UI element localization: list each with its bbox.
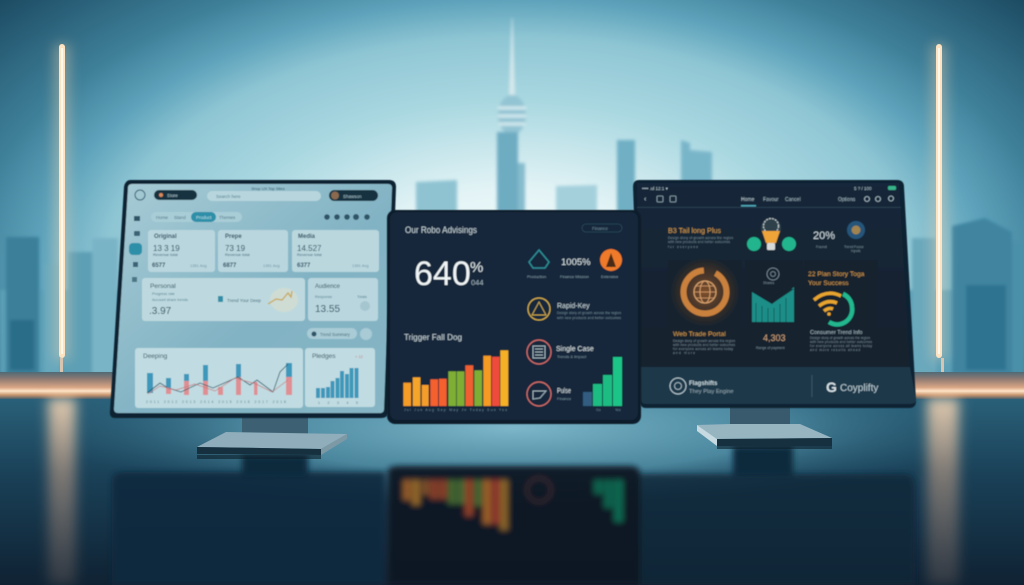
- right monitor: [633, 180, 916, 408]
- big stat: 640: [414, 255, 471, 293]
- panel: plan story: Consumer Trend Info: [810, 330, 863, 336]
- tabs: [151, 212, 242, 222]
- bar chart card: Pledges: [312, 353, 336, 360]
- stat card 2: [218, 230, 288, 272]
- status bar: •••• .ul 12:1 ▾: [642, 186, 669, 191]
- pulse row: [527, 382, 572, 406]
- panel: plan story: Your Success: [808, 280, 849, 287]
- wide card: audience: Totals: [357, 295, 367, 299]
- stat card 2: 73 19: [225, 244, 246, 253]
- top bar: Shawson: [343, 194, 362, 199]
- panel: web trade portal: for everyone across all teams today: [673, 347, 733, 351]
- toolbar icons: [324, 214, 370, 220]
- bar chart: Jul Jun Aug Sep May Jn Today Sun Yes: [404, 408, 507, 412]
- wide card: audience: [308, 278, 378, 321]
- footer band: Flagshifts: [689, 381, 718, 387]
- wide card: audience: Audience: [315, 284, 341, 290]
- combo chart card: Deeping: [143, 353, 168, 360]
- icon: light bulb: [747, 218, 796, 251]
- wide card: audience: Response: [315, 295, 332, 299]
- green bar chart: [583, 357, 622, 412]
- floor reflections of monitors: [112, 446, 915, 585]
- wide card: personal: Trend Your Deep: [227, 298, 261, 303]
- top bar: Store: [167, 193, 178, 198]
- tabs: Home: [156, 215, 169, 220]
- teal and pink bars: [147, 363, 292, 393]
- big stat: %: [470, 259, 483, 276]
- icon row: Production: [527, 274, 546, 279]
- nav bar: ‹: [644, 196, 647, 203]
- sidebar icons: [129, 216, 142, 282]
- top-left text block: B3 Tail long Plus: [668, 226, 721, 235]
- panel: web trade portal: Design story of growth across the region: [673, 339, 735, 343]
- panel: plan story: [804, 260, 878, 355]
- stat card 1: 6577: [152, 263, 166, 269]
- top bar: [135, 186, 378, 201]
- icon: round badge: Trend Focus: [844, 245, 864, 249]
- stat: 20 percent: Found: [816, 245, 827, 249]
- monitor bezel: [110, 180, 396, 418]
- rapid key row: with new products and better outcomes: [557, 316, 621, 320]
- panel body: [387, 210, 641, 424]
- stat card 3: Media: [298, 234, 316, 240]
- combo chart card: [135, 348, 303, 408]
- panel: plan story: with new products and better outcomes: [810, 340, 872, 344]
- single case row: Trends & Impact: [557, 354, 587, 359]
- status bar: 5 ? / 100: [854, 186, 872, 191]
- top-left text block: with new products and better outcomes: [668, 240, 730, 244]
- stat card 1: 13 3 19: [153, 244, 180, 253]
- stat card 3: [292, 230, 379, 272]
- stat card 3: Revenue total: [297, 252, 322, 257]
- panel: teal area chart: 4,303: [763, 333, 786, 343]
- globe: [669, 256, 741, 328]
- panel: web trade portal: and more: [673, 351, 695, 355]
- reflected bars: [403, 478, 623, 530]
- right skyline: [905, 218, 1024, 374]
- panel: web trade portal: with new products and better outcomes: [673, 343, 735, 347]
- pulse row: Pulse: [557, 388, 571, 395]
- background sky gradient: [0, 0, 1024, 400]
- tabs: Stand: [174, 215, 186, 220]
- monitor bezel: [633, 180, 916, 408]
- stat: 20 percent: 20%: [813, 230, 835, 242]
- green bar chart: Yes: [615, 408, 621, 412]
- big stat: 044: [471, 278, 484, 287]
- axis labels: 2011 2012 2013 2014 2015 2016 2017 2018: [146, 400, 286, 404]
- stat card 2: 6877: [223, 263, 237, 269]
- stat card 2: Revenue total: [225, 252, 250, 257]
- rapid key row: Design story of growth across the region: [557, 311, 621, 315]
- panel: web trade portal: [668, 256, 742, 355]
- nav bar: Cancel: [785, 197, 801, 203]
- stat card 1: 1351 Avg: [190, 263, 207, 268]
- wide card: personal: .3.97: [149, 306, 172, 317]
- stat card 1: Revenue total: [153, 252, 178, 257]
- nav bar: [637, 196, 901, 208]
- bar chart card: + 12: [355, 354, 364, 359]
- right neon pillar: [931, 44, 947, 374]
- top-left text block: [668, 226, 733, 249]
- footer band: G: [826, 379, 837, 395]
- summary pill: Trend Summary: [320, 332, 351, 337]
- stat card 3: 14.527: [297, 244, 322, 253]
- bar chart card: 1 2 3 4 5: [318, 401, 358, 405]
- top bar: Shop UX Top Sites: [251, 186, 285, 191]
- wide card: audience: 13.55: [315, 304, 340, 315]
- top-left text block: Design story of growth across the region: [668, 236, 733, 240]
- single case row: Single Case: [556, 346, 594, 353]
- rapid key row: Rapid-Key: [557, 303, 590, 310]
- central tower: [497, 18, 526, 213]
- wide card: personal: Progress rate: [152, 292, 175, 296]
- left neon pillar: [54, 44, 70, 374]
- stat card 2: Prepe: [225, 234, 242, 240]
- filter pill: [582, 224, 622, 232]
- city skyline: [0, 18, 1024, 374]
- bar chart: [403, 350, 508, 412]
- panel: teal area chart: Range of payment: [756, 346, 785, 350]
- nav bar: Favour: [763, 197, 779, 203]
- panel: plan story: and more results ahead: [810, 348, 860, 352]
- icon: wifi with green ring: [814, 293, 852, 324]
- right monitor stand: [697, 406, 832, 449]
- stat: 20 percent: [813, 230, 835, 249]
- icon: round badge: Inputs: [851, 249, 861, 253]
- left monitor: [110, 180, 396, 418]
- stat card 3: 6377: [297, 263, 311, 269]
- rapid key row: [528, 298, 621, 320]
- left skyline: [0, 237, 125, 374]
- monitor screen: [637, 183, 910, 367]
- wide card: personal: [142, 278, 305, 321]
- horizon light band: [0, 372, 1024, 400]
- panel heading: Our Robo Advisings: [405, 225, 477, 235]
- icon row: Extensive: [601, 274, 619, 279]
- footer band: [640, 367, 916, 404]
- wide card: personal: Personal: [150, 283, 176, 290]
- floor reflections of neon pillars: [48, 398, 959, 585]
- icon row: [527, 249, 622, 279]
- stat card 1: [148, 230, 215, 272]
- monitor screen: [114, 184, 392, 413]
- status bar: [642, 186, 896, 191]
- panel: teal area chart: Shares: [763, 281, 774, 285]
- icon row: Finance Mission: [560, 274, 589, 279]
- panel: web trade portal: Web Trade Portal: [673, 331, 726, 338]
- tabs: Themes: [219, 215, 236, 220]
- trend line: [147, 364, 288, 393]
- panel: plan story: for everyone across all teams today: [810, 344, 872, 348]
- panel: plan story: Design story of growth across the region: [810, 336, 870, 340]
- stat card 2: 1351 Avg: [263, 263, 280, 268]
- nav bar: Home: [741, 197, 755, 203]
- top bar: Search here: [216, 194, 241, 199]
- bar chart heading: Trigger Fall Dog: [404, 332, 462, 342]
- bar chart card: [305, 348, 375, 407]
- wide card: personal: Account share trends: [152, 298, 188, 302]
- middle panel: [387, 210, 641, 424]
- panel: plan story: 22 Plan Story Toga: [808, 271, 865, 278]
- nav bar: Options: [838, 197, 856, 203]
- top-left text block: for everyone: [668, 245, 698, 249]
- side towers: [416, 140, 712, 212]
- left monitor stand: [197, 416, 347, 459]
- floor: [0, 399, 1024, 585]
- filter pill: Finance: [592, 226, 609, 231]
- panel: teal area chart: [745, 260, 803, 355]
- stat card 1: Original: [154, 234, 177, 240]
- stat card 3: 1351 Avg: [352, 263, 369, 268]
- icon: round badge: [844, 221, 865, 253]
- tabs: Product: [196, 215, 212, 220]
- icon row: 1005%: [561, 257, 591, 268]
- summary pill: [307, 328, 372, 340]
- footer band: They Play Engine: [689, 389, 734, 395]
- footer band: Coyplifty: [840, 383, 878, 394]
- single case row: [527, 340, 594, 364]
- pulse row: Finance: [557, 396, 572, 401]
- green bar chart: Go: [596, 408, 601, 412]
